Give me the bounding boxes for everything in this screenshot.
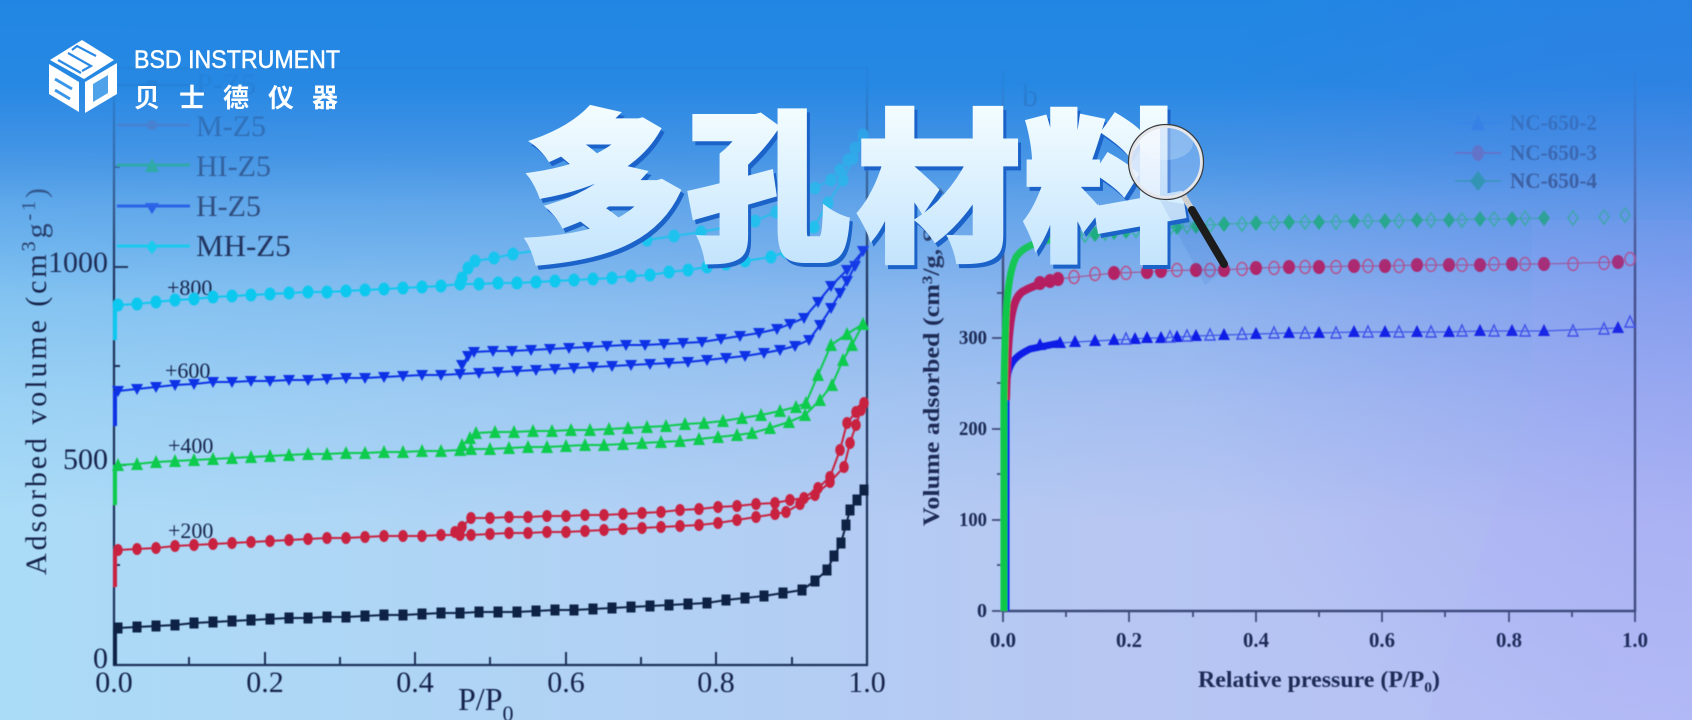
- right chart x axis title: Relative pressure (P/P: [1198, 667, 1416, 692]
- left chart legend: [117, 68, 291, 263]
- right chart x axis labels: 0.0: [990, 628, 1016, 652]
- right chart axes and ticks: [992, 70, 1635, 622]
- blue top veil over charts: [0, 0, 1692, 290]
- logo mark: cube: [49, 40, 117, 113]
- brand name: BSD INSTRUMENT: [134, 46, 340, 74]
- curve: green NC-650-4: [1004, 215, 1625, 611]
- panel: left isotherm chart: [18, 68, 886, 720]
- right chart y axis title: Volume adsorbed (cm: [919, 312, 944, 526]
- panel: right isotherm chart: [919, 70, 1648, 696]
- right chart legend: NC-650-2: [1510, 110, 1597, 135]
- left chart y axis labels: 0: [93, 642, 108, 675]
- right chart y axis labels: 0: [977, 600, 987, 622]
- curve: blue NC-650-2: [1006, 322, 1630, 611]
- left chart y axis labels: 1000: [48, 246, 108, 279]
- right side lavender tint: [1100, 0, 1692, 720]
- left chart x axis labels: 0.0: [95, 666, 133, 699]
- left chart legend: M-Z5: [196, 110, 266, 143]
- brand name chinese: 贝士德仪器: [134, 83, 338, 113]
- left chart y axis labels: [48, 246, 108, 675]
- left chart y axis title: -1: [18, 201, 40, 220]
- magnifier handle: [1183, 195, 1192, 210]
- left chart y axis title: Adsorbed volume (cm: [20, 254, 53, 575]
- right chart x axis labels: 0.2: [1116, 628, 1142, 652]
- left chart x axis labels: [95, 666, 886, 699]
- curve: red NC-650-3: [1006, 259, 1630, 400]
- right chart y axis title: /g, STP): [919, 186, 944, 277]
- right chart x axis labels: 1.0: [1622, 628, 1648, 652]
- offset annotations: +600: [165, 358, 210, 383]
- left chart x axis labels: 0.4: [396, 666, 434, 699]
- offset annotations: +800: [167, 275, 212, 300]
- left chart y axis title: ): [20, 188, 53, 198]
- left chart x axis labels: 0.2: [246, 666, 284, 699]
- left chart legend: MH-Z5: [196, 228, 291, 263]
- left chart y axis title: 3: [18, 241, 40, 251]
- left chart axes and ticks: [114, 68, 867, 665]
- curve: cyan MH-Z5: [115, 135, 863, 340]
- left chart x axis labels: 1.0: [848, 666, 886, 699]
- left chart legend: HI-Z5: [196, 150, 271, 183]
- left chart x axis title: P/P: [458, 681, 502, 717]
- right chart y axis labels: 100: [959, 509, 987, 531]
- offset annotations: [165, 275, 213, 543]
- left chart y axis labels: 500: [63, 443, 108, 476]
- title: 多孔材料: [522, 101, 1186, 282]
- curve: red M-Z5: [115, 403, 864, 587]
- right chart x axis labels: 0.6: [1369, 628, 1395, 652]
- left chart x axis labels: 0.8: [697, 666, 735, 699]
- right chart legend: [1455, 110, 1597, 193]
- right chart y axis title: 3: [920, 276, 936, 284]
- right chart x axis labels: [990, 628, 1648, 652]
- icon: magnifying glass: [1128, 124, 1224, 285]
- curve: blue H-Z5: [115, 251, 863, 426]
- left chart x axis labels: 0.6: [547, 666, 585, 699]
- right chart y axis labels: 300: [959, 327, 987, 349]
- right chart x axis title: ): [1432, 667, 1440, 692]
- right chart legend: NC-650-3: [1510, 140, 1597, 165]
- magnifier lens: [1130, 126, 1202, 198]
- right chart y axis labels: [959, 145, 987, 622]
- right chart y axis labels: 500: [959, 145, 987, 167]
- logo: [49, 40, 340, 113]
- right chart y axis labels: 200: [959, 418, 987, 440]
- panel letter b: b: [1022, 77, 1038, 113]
- offset annotations: +200: [168, 518, 213, 543]
- right chart legend: NC-650-4: [1510, 168, 1597, 193]
- right chart x axis labels: 0.4: [1243, 628, 1269, 652]
- right chart x axis labels: 0.8: [1496, 628, 1522, 652]
- right chart y axis labels: 400: [959, 236, 987, 258]
- right chart x axis title: 0: [1424, 680, 1432, 696]
- magnifier shadow: [1160, 200, 1222, 285]
- offset annotations: +400: [168, 433, 213, 458]
- left chart legend: H-Z5: [196, 190, 261, 223]
- curve: black P-Z5: [115, 490, 864, 665]
- curve: green HI-Z5: [115, 324, 863, 505]
- left chart legend: P-Z5: [196, 68, 256, 101]
- left chart y axis title: g: [20, 223, 53, 238]
